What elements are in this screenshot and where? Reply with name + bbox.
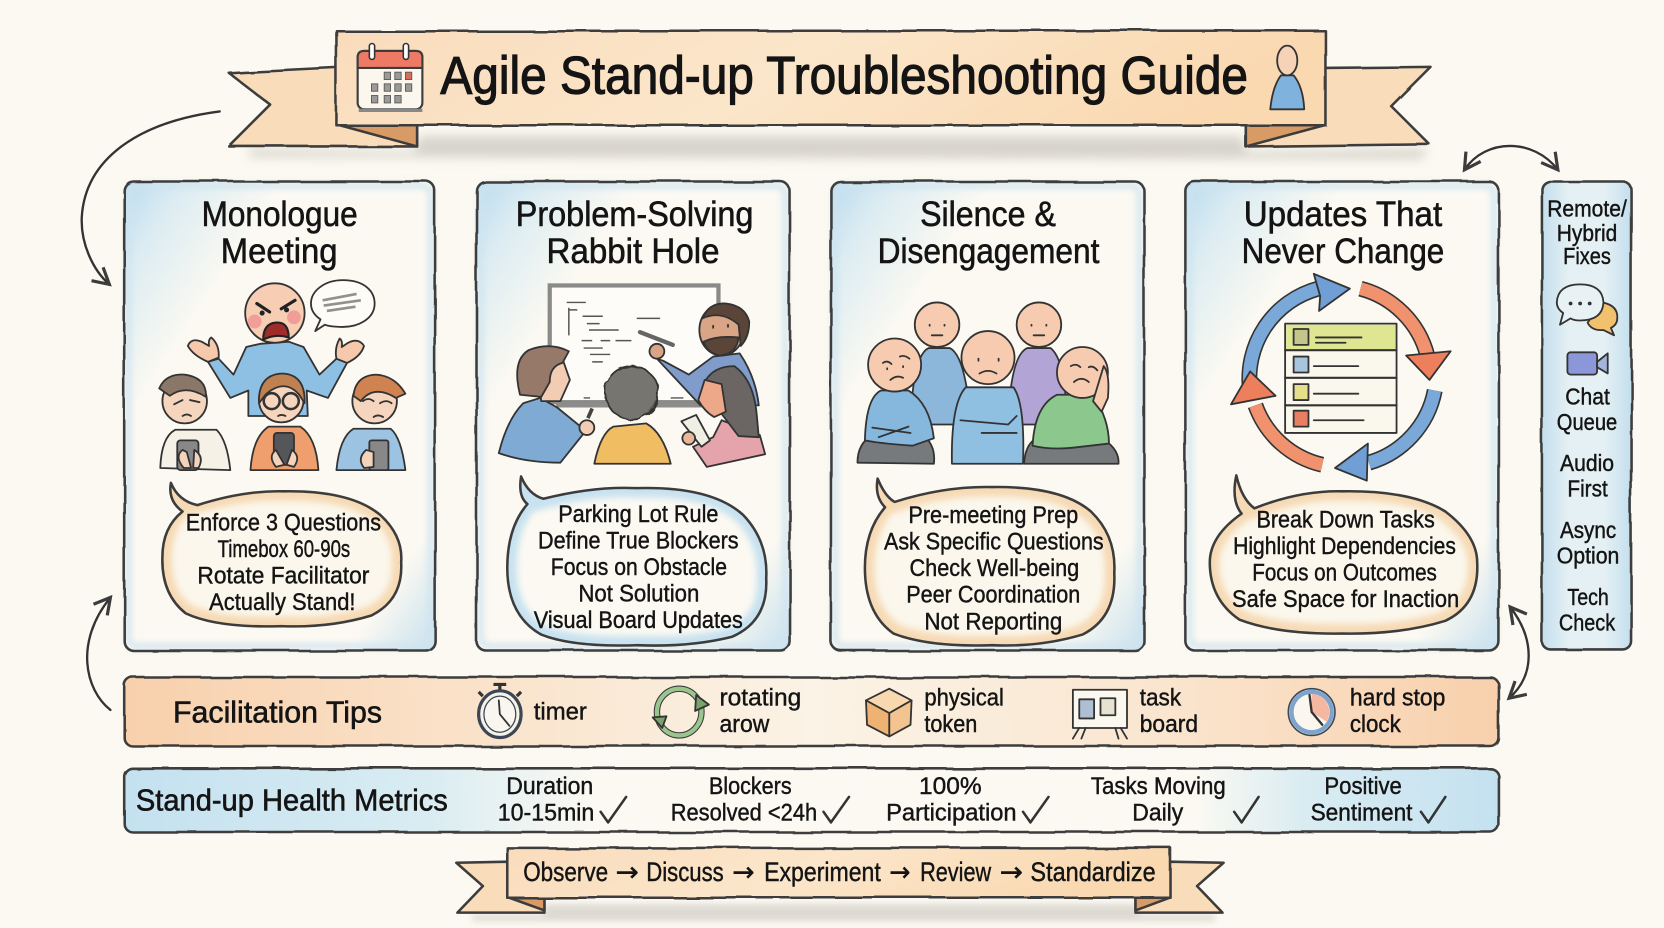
process text: → [889,857,911,888]
metrics heading: Stand-up Health Metrics [136,783,448,818]
tips bubble [162,483,401,626]
right fold [1135,898,1169,910]
panel wash [481,186,785,646]
panel background [477,181,790,651]
side heading: Fixes [1563,243,1611,269]
side list: Option [1557,542,1619,568]
right tail [1135,862,1224,913]
bottom banner [456,848,1224,921]
process text: Discuss [646,857,724,887]
bubble text: Peer Coordination [906,582,1080,609]
speaker body and arms [208,342,347,416]
bubble fill [874,497,1105,636]
illustration: speaker and phone users [159,280,405,470]
bubble text: Define True Blockers [538,528,739,555]
panel: silence and disengagement [831,181,1144,651]
woman body [693,420,765,467]
left listener [159,375,230,470]
tips bubble [1210,475,1477,634]
heading: Meeting [221,232,337,271]
task board label: task [1140,685,1182,712]
task board label [1140,685,1198,738]
panel outline [477,181,790,651]
side list: Queue [1557,409,1617,435]
task list [1285,324,1397,433]
right man head [699,305,744,355]
illustration: whiteboard discussion [499,285,765,467]
tips bubble [865,479,1114,645]
right listener [336,375,405,470]
side panel outline [1542,181,1631,649]
icon: physical token [866,689,912,736]
heading: Problem-Solving [516,195,753,234]
right man beard [704,337,739,355]
banner face [507,848,1171,898]
metric: tasks moving: Daily [1132,799,1184,826]
metric: participation: 100% [919,773,982,800]
side heading: Remote/ [1547,195,1627,221]
middle listener [250,374,318,470]
heading [516,195,753,271]
bubble outline [162,483,401,626]
left ribbon tail [229,68,417,146]
hard stop clock label: hard stop [1350,685,1445,712]
speech bubble [311,280,375,331]
right ribbon tail [1246,67,1431,146]
arrow: orange right [1360,289,1451,380]
arrow: blue top [1249,274,1350,391]
metric: blockers: Resolved <24h [671,799,817,826]
side list [1557,383,1619,635]
bubble outline [865,479,1114,645]
heading: Disengagement [878,232,1100,271]
bubble text [534,501,743,634]
left man body [499,398,586,463]
panel background [1185,181,1498,651]
bubble text: Enforce 3 Questions [186,510,381,537]
hard stop clock label [1350,685,1445,738]
right man hair [703,303,749,346]
back right person [1008,302,1067,424]
bubble text: Rotate Facilitator [197,563,369,590]
icon: chat bubbles [1557,284,1617,335]
rotating arrow label: arow [720,711,770,738]
side list: Async [1560,517,1617,543]
heading: Updates That [1244,195,1442,234]
heading: Monologue [202,195,358,234]
middle person body [594,423,671,464]
side list: Audio [1560,450,1614,476]
bubble text: Timebox 60-90s [218,536,350,563]
banner face [336,31,1325,125]
bubble text: Not Solution [578,581,699,608]
bubble wash [1210,475,1477,634]
side list: Check [1559,609,1615,635]
left person [857,339,934,464]
icon: hard stop clock [1288,689,1335,735]
rotating arrow label [720,685,801,738]
timer label: timer [534,698,587,725]
illustration: cycle around task list [1231,274,1451,481]
speaker hands [188,337,364,363]
metric: duration: 10-15min [498,799,594,826]
speaker face [248,300,301,340]
metric: sentiment: Sentiment [1311,799,1413,826]
physical token label: token [924,711,977,738]
metric: participation [886,773,1048,826]
bubble wash [162,483,401,626]
process text: Standardize [1030,857,1156,887]
task board label: board [1140,711,1198,738]
bubble text: Ask Specific Questions [884,529,1104,556]
bubble wash [865,479,1114,645]
woman face [698,380,726,417]
rotating arrow label: rotating [720,685,801,712]
bubble text: Check Well-being [909,555,1079,582]
bubble text: Highlight Dependencies [1233,533,1456,560]
side panel background [1542,181,1631,649]
banner shadow [249,136,1427,159]
bubble text: Focus on Outcomes [1252,559,1437,586]
metric: duration: Duration [506,773,593,800]
bubble text: Safe Space for Inaction [1232,586,1459,613]
whiteboard scribbles [567,302,683,398]
process text: Review [920,857,992,887]
side list: Chat [1565,383,1610,409]
panel wash [835,186,1140,646]
left man face [536,359,570,401]
arrow: top right double [1464,146,1558,170]
whiteboard [550,285,718,402]
whiteboard tray [556,403,703,407]
panel outline [1185,181,1498,651]
icon: video camera [1567,352,1608,375]
heading: Never Change [1242,232,1444,271]
process text: → [616,857,639,888]
bubble text: Not Reporting [924,608,1062,635]
bubble text: Focus on Obstacle [551,554,727,581]
tips heading: Facilitation Tips [173,695,382,730]
icon: task board [1073,690,1127,739]
right man hand [649,344,664,359]
icon: timer [479,684,521,738]
hard stop clock label: clock [1350,711,1402,738]
panel: facilitation tips [124,677,1498,746]
metric: participation: Participation [886,799,1017,826]
bottom banner shadow [472,904,1215,921]
panel: remote/hybrid fixes [1542,181,1631,649]
back left person [911,302,971,424]
panel outline [831,181,1144,651]
left man hair [517,346,569,397]
arrow: lower left curve [87,597,110,710]
woman hair [705,366,759,437]
bubble text: Break Down Tasks [1256,506,1435,533]
left tail [456,862,544,913]
process text [523,857,1156,888]
left man hand [579,420,594,435]
bubble fill [1219,501,1468,624]
side heading: Hybrid [1557,220,1617,246]
panel outline [124,181,435,651]
arrow: right double [1509,607,1529,698]
metric: blockers [671,773,849,826]
panel: problem-solving rabbit hole [477,181,790,651]
physical token label [924,685,1004,738]
right man body [657,353,759,405]
bubble text: Pre-meeting Prep [908,502,1078,529]
title text: Agile Stand-up Troubleshooting Guide [440,46,1248,105]
bubble text: Parking Lot Rule [558,501,718,528]
speaker head [245,283,305,343]
bubble text [1232,506,1459,613]
illustration: disengaged group [857,302,1119,464]
woman hand [682,432,695,445]
title banner [229,31,1431,159]
left fold [340,125,417,146]
metrics bar [124,768,1498,832]
icon: person [1270,46,1304,109]
metric: tasks moving [1091,773,1259,826]
marker [640,332,673,345]
panel: monologue meeting [124,181,435,651]
bubble fill [517,497,757,636]
panel wash [128,186,431,646]
arrow: blue bottom [1335,391,1435,481]
panel wash [1190,186,1494,646]
side heading [1547,195,1627,269]
left fold [509,898,544,910]
metric: duration [498,773,626,826]
heading [202,195,358,271]
panel: updates that never change [1185,181,1498,651]
arrow: top left curve [82,111,220,284]
center person [952,331,1023,464]
bubble outline [507,476,766,646]
process text: Observe [523,857,608,887]
icon: calendar [358,44,422,110]
panel background [124,181,435,651]
process text: → [732,857,755,888]
bubble text: Actually Stand! [209,589,356,616]
bubble wash [507,476,766,646]
speech scribble [323,294,361,311]
metric: blockers: Blockers [709,773,792,800]
metric: sentiment [1311,773,1445,826]
metric: sentiment: Positive [1324,773,1402,800]
bubble fill [172,501,392,617]
side list: First [1567,476,1608,502]
process text: Experiment [764,857,881,887]
right person [1024,347,1119,464]
middle person head [605,366,658,419]
bubble text: Visual Board Updates [534,607,743,634]
physical token label: physical [924,685,1004,712]
right man face details [713,325,728,328]
metric: tasks moving: Tasks Moving [1091,773,1226,800]
arrow: orange left [1231,371,1322,465]
panel background [831,181,1144,651]
bubble outline [1210,475,1477,634]
pointer [588,409,592,418]
heading [1242,195,1444,271]
right fold [1246,125,1324,146]
panel: stand-up health metrics [124,768,1498,832]
heading: Silence & [920,195,1056,234]
tablet [681,415,710,447]
bubble text [884,502,1104,635]
heading: Rabbit Hole [547,232,720,271]
side list: Tech [1567,584,1609,610]
heading [878,195,1100,271]
bubble text [186,510,381,616]
tips bar [124,677,1498,746]
icon: rotating arrow [653,689,709,735]
process text: → [1000,857,1023,888]
tips bubble [507,476,766,646]
